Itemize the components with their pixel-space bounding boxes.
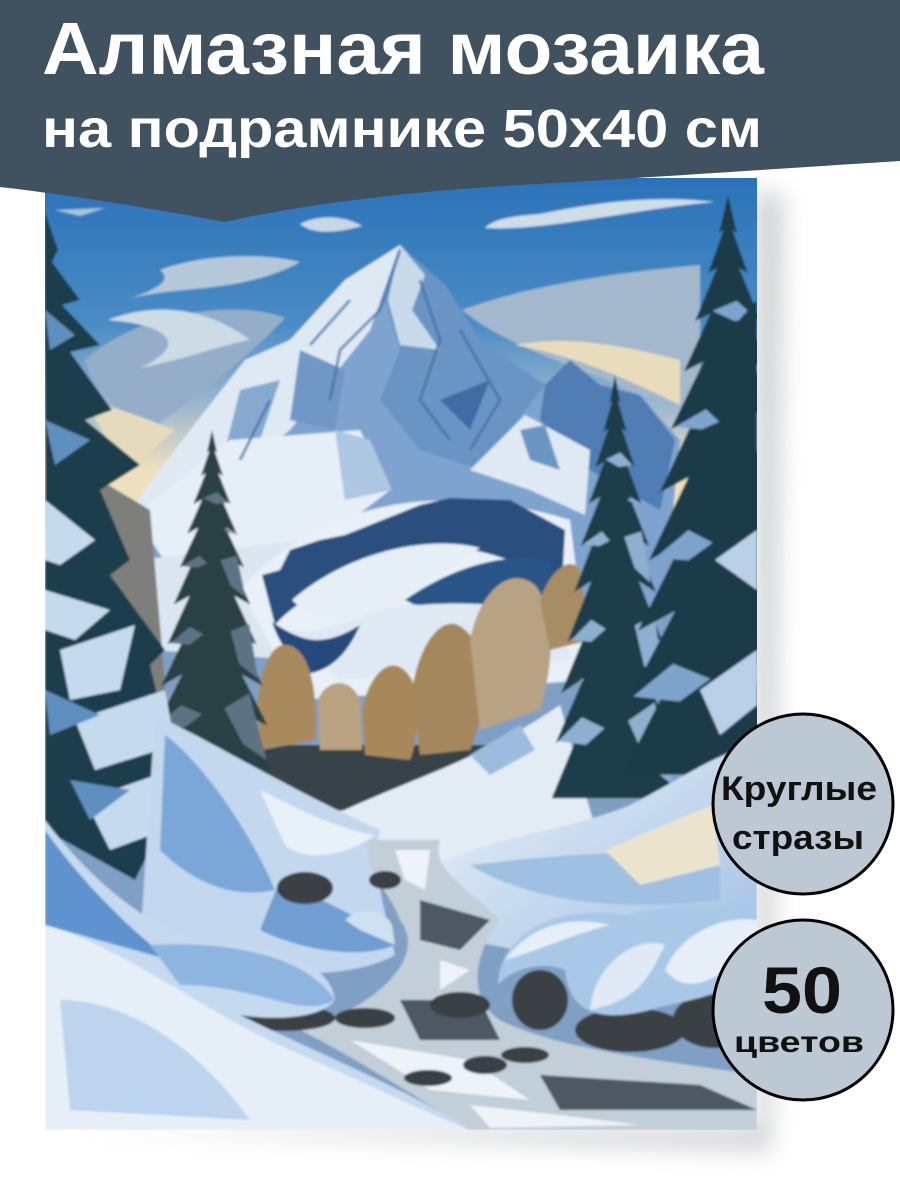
title line 1: Алмазная мозаика [42,7,765,90]
spruce: centre left [152,430,272,770]
badge: 50 colours: цветов [734,1026,864,1059]
left snow bank [140,715,395,973]
canvas drop shadow [80,190,782,1150]
spruce trees [45,195,834,880]
snowy foothills with forest bands [240,498,590,700]
badge: round rhinestones [713,714,893,894]
sky [40,170,760,530]
foreground snow [45,820,470,1130]
base tone [58,558,737,1110]
header banner [0,0,900,222]
title line 2: на подрамнике 50х40 см [42,99,762,159]
far bank snow [340,704,594,864]
river boulders [235,871,757,1086]
right snow bank [443,750,757,950]
badge: round rhinestones: стразы [732,819,864,857]
golden autumn trees [250,564,590,810]
hazy woodland behind left trees [98,483,166,694]
badge: 50 colours [713,920,893,1100]
badge: round rhinestones: Круглые [721,770,877,808]
spruce: centre right [552,375,678,798]
snow-capped rocks, right [345,898,757,1015]
stream [300,840,757,1130]
spruce: far right [632,196,757,776]
spruce: far left [45,212,166,881]
mountain ridge lines [240,250,500,460]
painting: winter mountain landscape [45,178,757,1130]
main mountain [125,245,680,660]
badge: 50 colours: 50 [762,953,842,1027]
clouds [55,199,715,470]
